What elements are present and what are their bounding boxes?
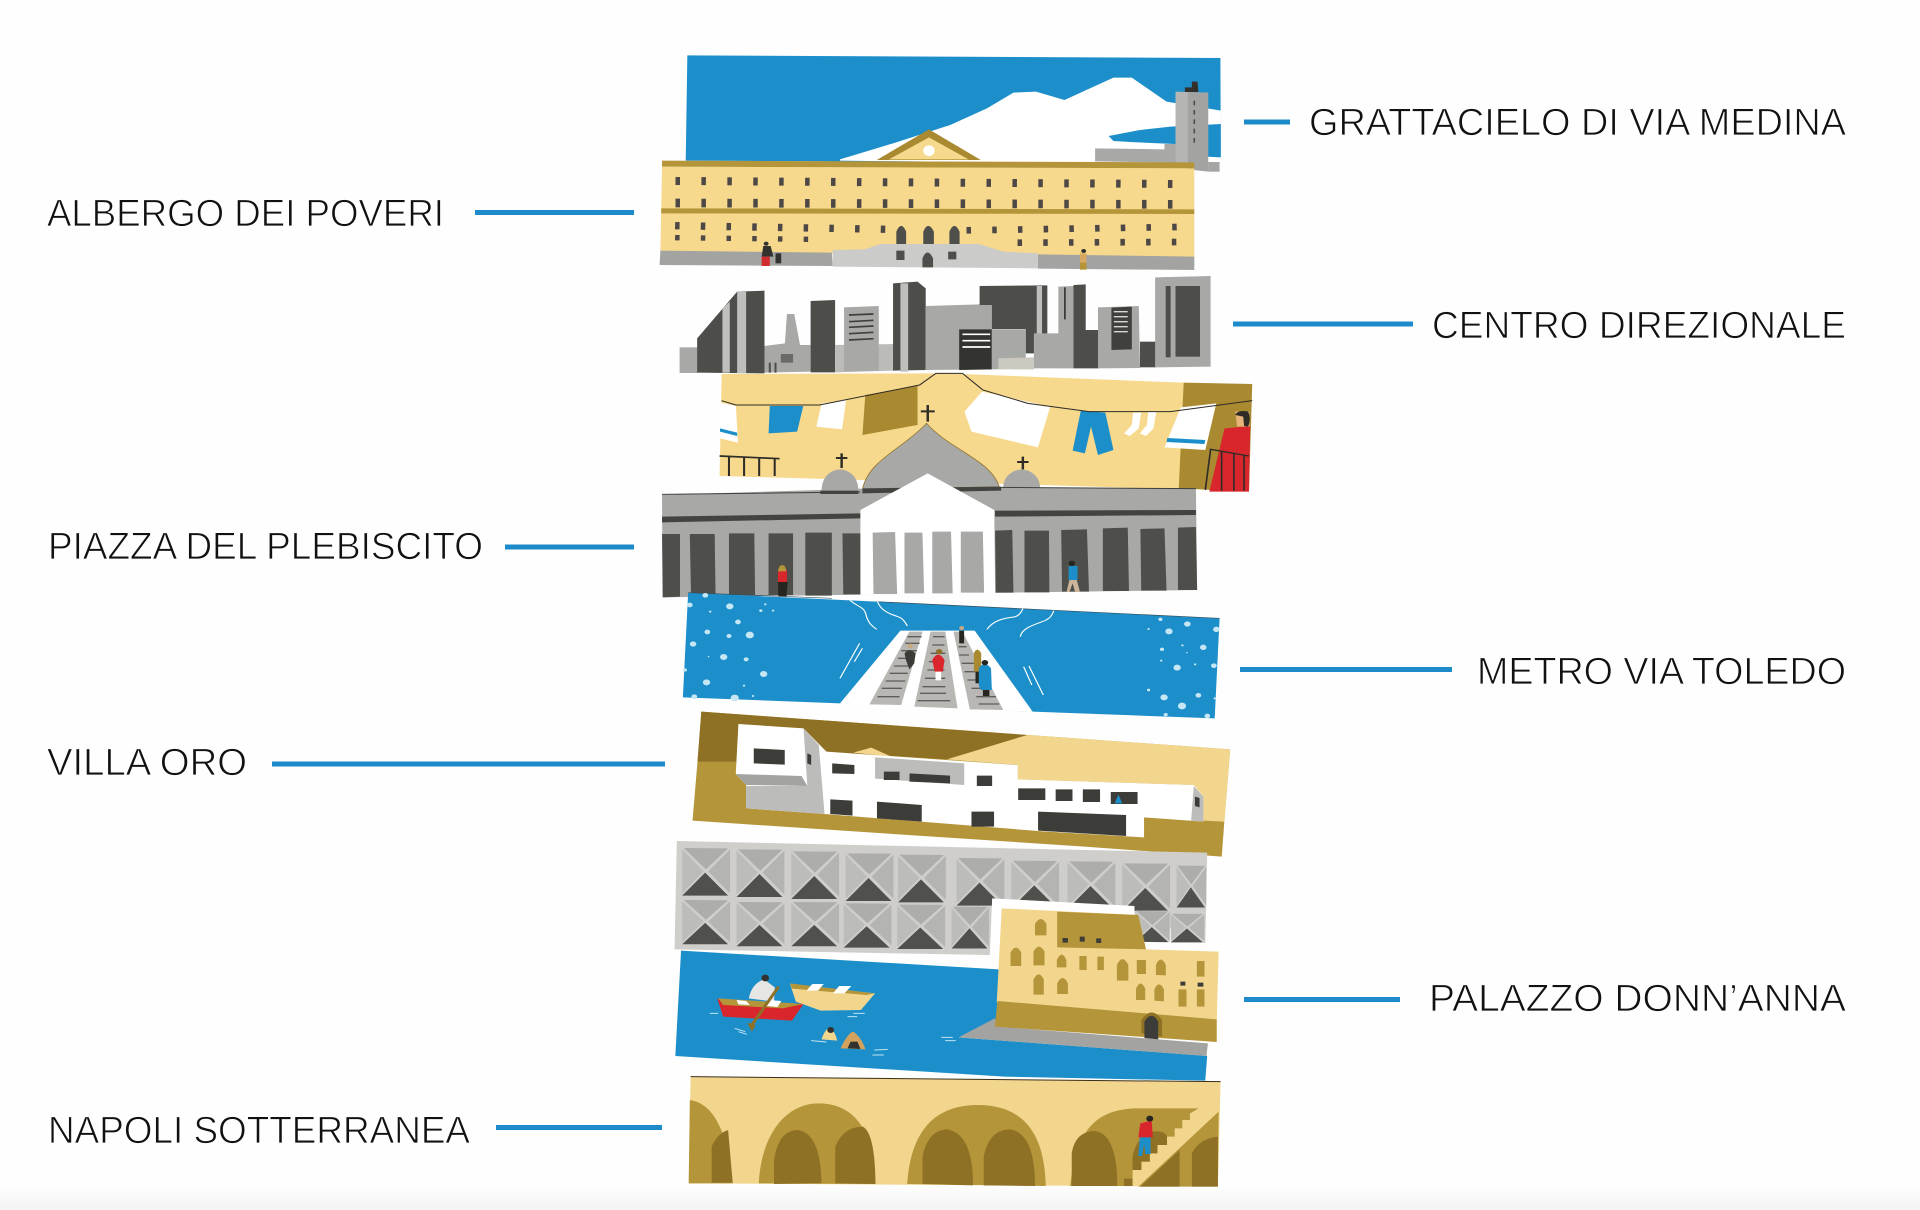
laundry — [720, 373, 1252, 455]
panel: laundry alley — [720, 373, 1252, 492]
people at Albergo — [762, 242, 1087, 270]
label: Centro Direzionale: CENTRO DIREZIONALE — [1432, 305, 1846, 347]
panel: Metro Via Toledo — [683, 593, 1220, 718]
label: Villa Oro: VILLA ORO — [47, 742, 247, 784]
label: Albergo dei Poveri: ALBERGO DEI POVERI — [47, 193, 444, 235]
cracks and reflections — [840, 601, 1054, 695]
church domes and crosses — [822, 405, 1040, 491]
panel: bay water with boats and swimmers — [675, 951, 1207, 1081]
panel: Centro Direzionale skyline — [680, 276, 1211, 373]
swimmers — [821, 1027, 865, 1049]
people in metro — [904, 626, 992, 696]
balcony left — [720, 456, 780, 476]
moored boat — [790, 983, 875, 1011]
panel: Palazzo Donn'Anna — [958, 898, 1219, 1056]
label: Grattacielo di Via Medina: GRATTACIELO DI VIA MEDINA — [1309, 102, 1847, 144]
light dots — [683, 593, 1220, 718]
label: Centro Direzionale — [1233, 305, 1846, 347]
panel: Albergo dei Poveri — [660, 129, 1194, 270]
label: Piazza del Plebiscito: PIAZZA DEL PLEBISCITO — [48, 526, 483, 568]
panel: Grattacielo di Via Medina sky and Vesuvius — [686, 55, 1221, 172]
people at Piazza — [778, 561, 1080, 597]
panel: Napoli Sotterranea — [689, 1077, 1221, 1187]
label: Palazzo Donn'Anna: PALAZZO DONN’ANNA — [1429, 978, 1847, 1020]
label: Metro Via Toledo — [1240, 651, 1846, 693]
rowing boat and rower — [717, 975, 803, 1032]
label: Metro Via Toledo: METRO VIA TOLEDO — [1477, 651, 1846, 693]
panel: Piazza del Plebiscito — [662, 473, 1197, 597]
woman on balcony — [1205, 411, 1250, 492]
scene: Vesuvius, Grattacielo, Albergo dei Poveri and Centro Direzionale — [660, 55, 1221, 373]
label: Napoli Sotterranea: NAPOLI SOTTERRANEA — [48, 1110, 471, 1152]
scene: Villa Oro, truss bridge, Palazzo Donn'Anna and Napoli Sotterranea — [675, 712, 1230, 1187]
panel: truss bridge — [675, 841, 1207, 957]
person on the stairs — [1138, 1116, 1153, 1156]
ripples — [710, 1013, 956, 1055]
label: Villa Oro — [47, 742, 665, 784]
panel: Villa Oro — [693, 712, 1230, 857]
label: Palazzo Donn'Anna — [1244, 978, 1847, 1020]
scene: clothesline alley, Piazza del Plebiscito and Metro Via Toledo — [662, 373, 1252, 718]
